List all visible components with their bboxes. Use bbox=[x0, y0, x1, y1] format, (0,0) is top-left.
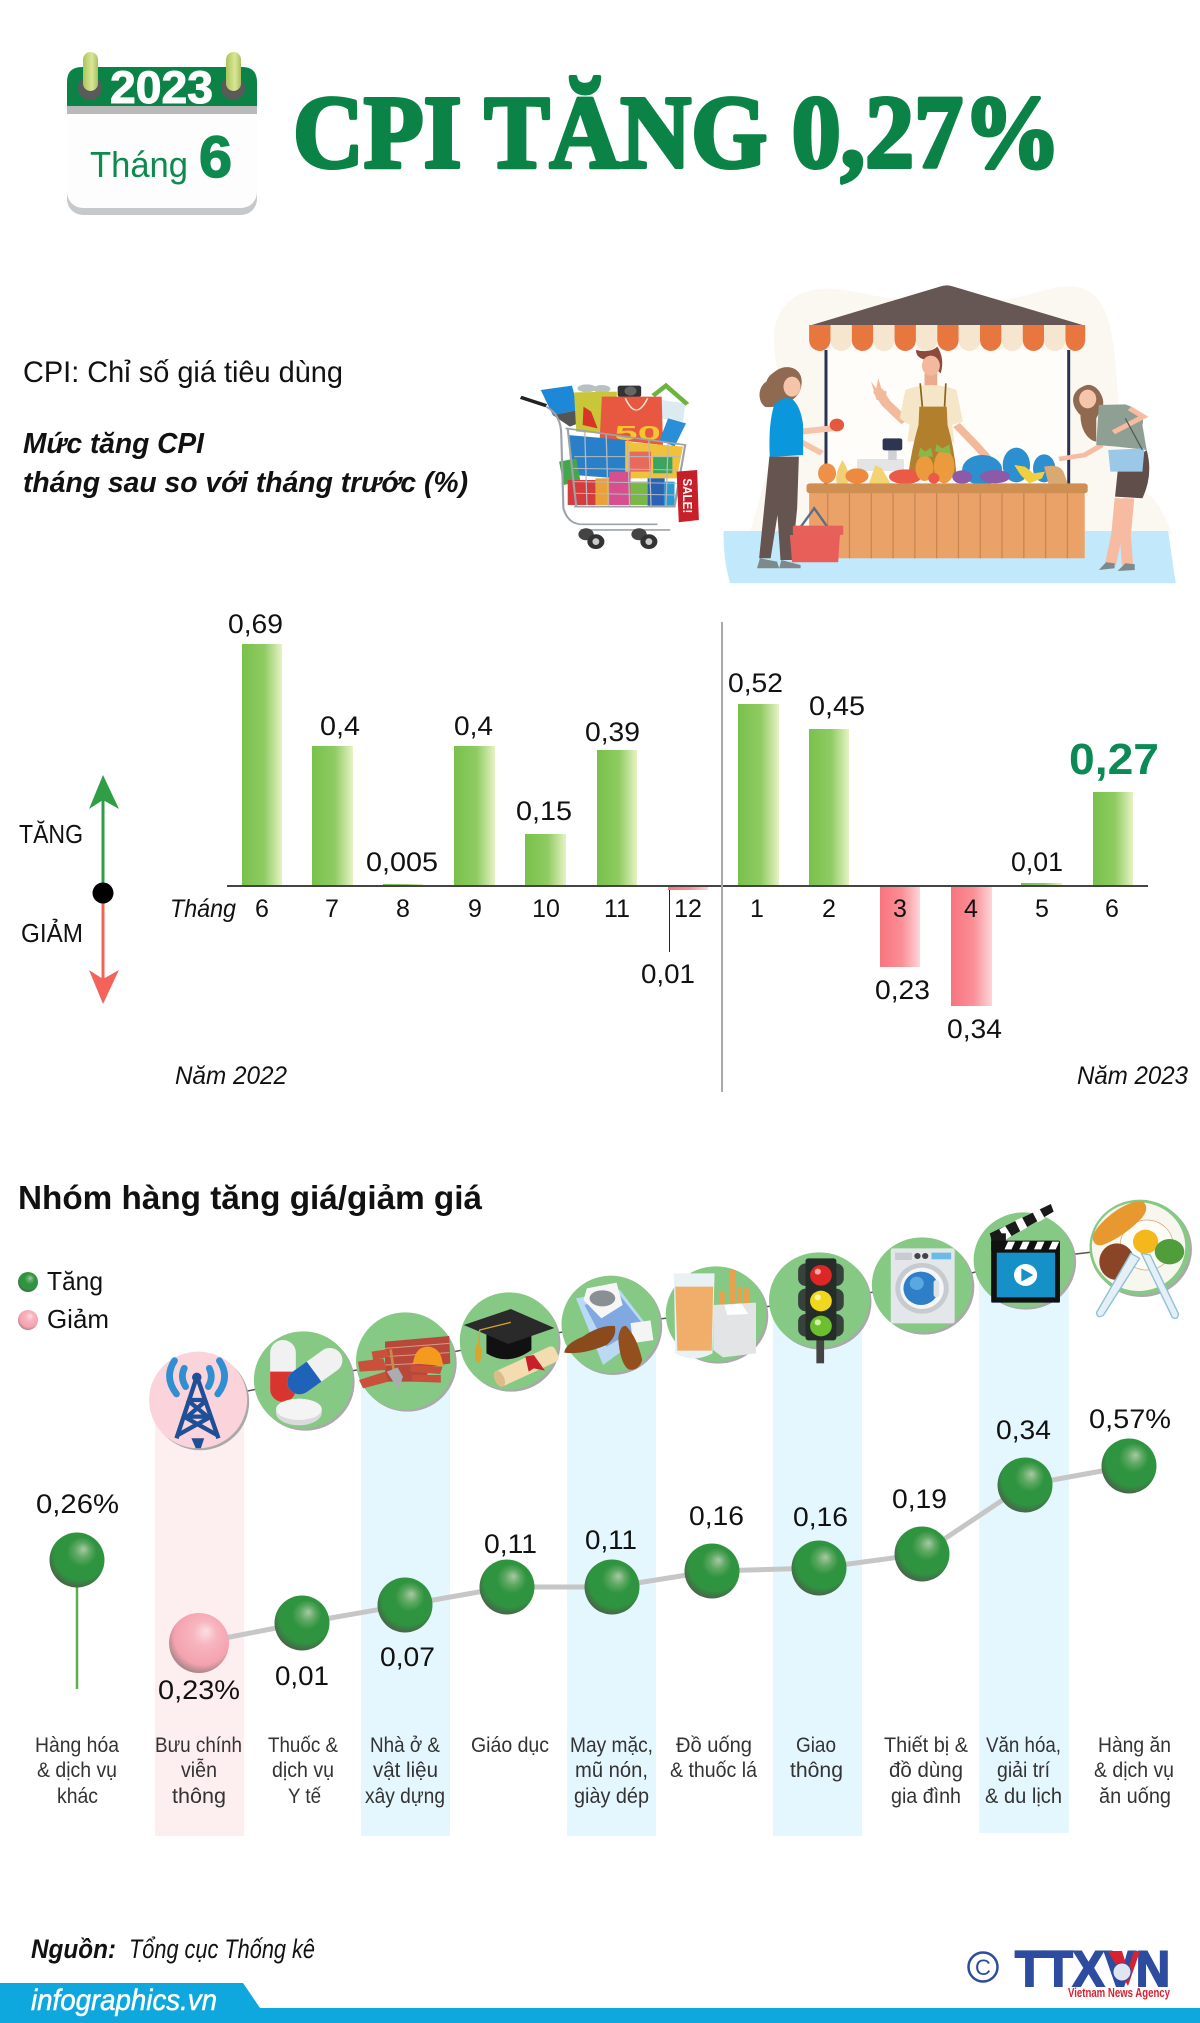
category labels: giải trí bbox=[997, 1759, 1050, 1782]
category labels: giày dép bbox=[574, 1785, 649, 1808]
group value labels: 0,19 bbox=[892, 1484, 947, 1514]
monthly CPI bar chart bbox=[170, 609, 1188, 1092]
month axis labels: 6 bbox=[1105, 895, 1119, 923]
group value labels: 0,23% bbox=[158, 1675, 240, 1705]
icon: telecom tower bbox=[149, 1352, 249, 1450]
calendar badge: 6 bbox=[199, 125, 232, 190]
calendar badge: 2023 bbox=[110, 62, 213, 113]
icon: shopping cart bbox=[521, 384, 699, 549]
category labels: Giao bbox=[796, 1734, 836, 1757]
calendar badge bbox=[67, 52, 257, 215]
category labels: thông bbox=[790, 1759, 843, 1782]
cash register bbox=[857, 438, 904, 471]
icon: bricks, trowel and helmet bbox=[356, 1312, 457, 1412]
bars bbox=[242, 644, 1133, 1006]
icon: shirt and shoes bbox=[561, 1276, 662, 1375]
category labels: viễn bbox=[181, 1759, 217, 1782]
icon: film clapperboard bbox=[974, 1204, 1076, 1310]
year label 2023: Năm 2023 bbox=[1077, 1062, 1188, 1090]
website label: infographics.vn bbox=[31, 1984, 217, 2017]
value labels: 0,01 bbox=[641, 959, 695, 989]
legend: increase / decrease: Giảm bbox=[47, 1304, 109, 1334]
icon: traffic light bbox=[769, 1252, 871, 1363]
category labels: & dịch vụ bbox=[1094, 1759, 1174, 1782]
category labels: ăn uống bbox=[1099, 1785, 1171, 1808]
group value labels: 0,01 bbox=[275, 1661, 329, 1691]
month axis labels: 7 bbox=[325, 895, 339, 923]
icon: medicine pills bbox=[254, 1331, 355, 1431]
group value labels: 0,16 bbox=[689, 1501, 744, 1531]
origin dot bbox=[92, 882, 114, 904]
category labels: vật liệu bbox=[373, 1759, 438, 1782]
value labels: 0,69 bbox=[228, 609, 283, 639]
month axis labels: 1 bbox=[750, 895, 764, 923]
counter bbox=[807, 483, 1088, 558]
label decrease: GIẢM bbox=[21, 918, 83, 948]
up/down legend bbox=[19, 775, 119, 1004]
value labels: 0,34 bbox=[947, 1014, 1002, 1044]
column highlights bbox=[155, 1260, 1069, 1836]
logo: TTXVN: C bbox=[975, 1955, 991, 1980]
connectors between value dots bbox=[199, 1466, 1129, 1643]
awning bbox=[809, 325, 1085, 351]
category labels: Đồ uống bbox=[676, 1734, 752, 1757]
source bbox=[31, 1934, 315, 1964]
category labels: May mặc, bbox=[570, 1734, 653, 1757]
chart subtitle bbox=[23, 428, 468, 499]
month axis labels: Tháng bbox=[170, 895, 236, 923]
title: CPI TĂNG 0,27% bbox=[293, 75, 1061, 190]
icon: food plate bbox=[1089, 1200, 1192, 1318]
group value labels: 0,16 bbox=[793, 1502, 848, 1532]
category labels: khác bbox=[57, 1785, 98, 1808]
month axis labels: 6 bbox=[255, 895, 269, 923]
arrow down: decrease bbox=[89, 900, 119, 1004]
category labels: Bưu chính bbox=[155, 1734, 242, 1757]
section heading: Nhóm hàng tăng giá/giảm giá bbox=[18, 1179, 483, 1216]
category labels bbox=[35, 1734, 1174, 1808]
icon: graduation cap and diploma bbox=[460, 1292, 560, 1392]
value labels: 0,4 bbox=[454, 711, 493, 741]
group value labels: 0,34 bbox=[996, 1415, 1051, 1445]
category labels: Hàng ăn bbox=[1098, 1734, 1171, 1757]
category labels: & thuốc lá bbox=[670, 1759, 757, 1782]
chart subtitle: Mức tăng CPI bbox=[23, 428, 205, 460]
month axis labels: 11 bbox=[604, 895, 630, 923]
group value labels: 0,26% bbox=[36, 1489, 119, 1519]
footer band bbox=[0, 1983, 1200, 2023]
value labels: 0,4 bbox=[320, 711, 360, 741]
category labels: Giáo dục bbox=[471, 1734, 549, 1757]
icon: shopping cart: 50 bbox=[615, 422, 661, 445]
category labels: Thiết bị & bbox=[884, 1734, 968, 1757]
icon: washing machine bbox=[872, 1237, 974, 1335]
year label 2022: Năm 2022 bbox=[175, 1062, 287, 1090]
stem of first dot bbox=[76, 1587, 78, 1689]
value labels: 0,005 bbox=[366, 847, 438, 877]
month axis labels: 9 bbox=[468, 895, 482, 923]
icon: shopping cart: SALE! bbox=[680, 478, 693, 513]
group value labels: 0,57% bbox=[1089, 1404, 1171, 1434]
logo: TTXVN: TTXVN bbox=[1015, 1941, 1170, 1997]
arrow up: increase bbox=[89, 775, 119, 885]
month axis labels: 10 bbox=[532, 895, 560, 923]
category labels: Văn hóa, bbox=[986, 1734, 1061, 1757]
group value labels: 0,11 bbox=[585, 1525, 637, 1555]
category labels: & dịch vụ bbox=[37, 1759, 117, 1782]
calendar badge: Tháng bbox=[90, 144, 188, 185]
category labels: thông bbox=[172, 1785, 226, 1808]
group value labels bbox=[36, 1404, 1171, 1705]
value labels: 0,45 bbox=[809, 691, 865, 721]
month axis labels: 12 bbox=[674, 895, 702, 923]
source: Nguồn: bbox=[31, 1934, 116, 1964]
category labels: Y tế bbox=[288, 1785, 321, 1808]
chart subtitle: tháng sau so với tháng trước (%) bbox=[23, 467, 468, 499]
month axis labels: 5 bbox=[1035, 895, 1049, 923]
group value labels: 0,11 bbox=[484, 1529, 537, 1559]
category labels: dịch vụ bbox=[272, 1759, 334, 1782]
fruit and vegetables bbox=[818, 444, 1068, 485]
value labels: 0,23 bbox=[875, 975, 930, 1005]
month axis labels: 3 bbox=[893, 895, 907, 923]
legend: increase / decrease: Tăng bbox=[47, 1266, 103, 1296]
month axis labels: 8 bbox=[396, 895, 410, 923]
category labels: & du lịch bbox=[985, 1785, 1062, 1808]
category labels: Nhà ở & bbox=[370, 1734, 440, 1757]
category labels: Thuốc & bbox=[268, 1734, 338, 1757]
value labels: 0,15 bbox=[516, 796, 572, 826]
value labels: 0,39 bbox=[585, 717, 640, 747]
value labels: 0,27 bbox=[1069, 735, 1159, 784]
woman customer with bag bbox=[1059, 385, 1149, 571]
group value labels: 0,07 bbox=[380, 1642, 435, 1672]
month axis labels: 4 bbox=[964, 895, 978, 923]
vendor bbox=[871, 347, 991, 475]
shopping basket bbox=[790, 508, 843, 562]
woman customer with apple bbox=[757, 367, 844, 568]
category labels: Hàng hóa bbox=[35, 1734, 119, 1757]
month axis labels: 2 bbox=[822, 895, 836, 923]
icon: drink and cigarettes bbox=[666, 1266, 768, 1364]
legend: increase / decrease bbox=[18, 1266, 109, 1334]
source: Tổng cục Thống kê bbox=[129, 1934, 315, 1964]
category labels: đồ dùng bbox=[889, 1759, 963, 1782]
value labels: 0,01 bbox=[1011, 847, 1063, 877]
month axis labels bbox=[170, 895, 1119, 923]
illustration: market stall bbox=[724, 285, 1176, 583]
value dots bbox=[50, 1438, 1156, 1673]
value labels: 0,52 bbox=[728, 668, 783, 698]
label increase: TĂNG bbox=[19, 819, 83, 849]
roof bbox=[812, 285, 1083, 325]
value labels bbox=[228, 609, 1159, 1044]
category labels: mũ nón, bbox=[575, 1759, 648, 1782]
category labels: gia đình bbox=[891, 1785, 961, 1808]
category labels: xây dựng bbox=[365, 1785, 445, 1808]
CPI definition text: CPI: Chỉ số giá tiêu dùng bbox=[23, 356, 343, 389]
